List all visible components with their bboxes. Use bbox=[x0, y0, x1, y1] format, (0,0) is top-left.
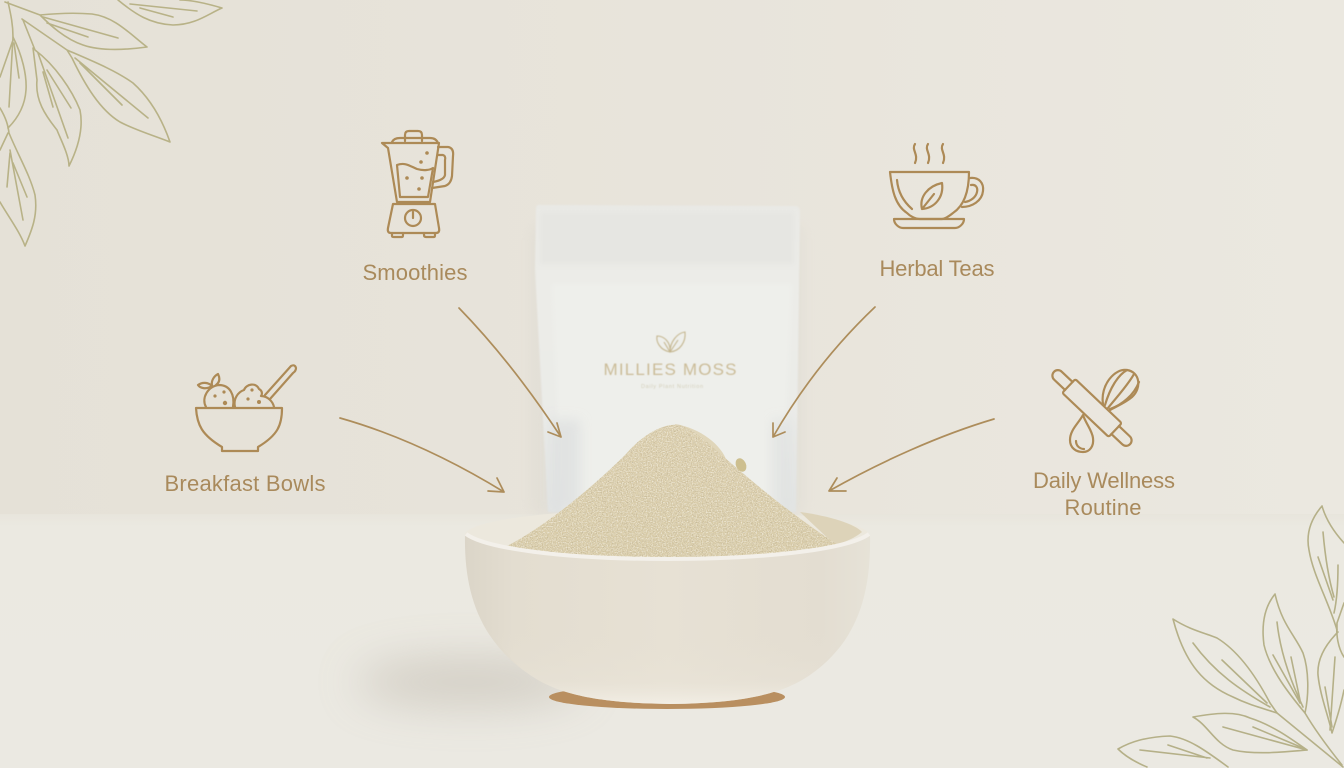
brand logo bbox=[604, 332, 736, 390]
product pouch bbox=[530, 205, 804, 515]
label: Herbal Teas: Herbal Teas bbox=[880, 256, 994, 281]
arrow: smoothies to bowl bbox=[459, 308, 561, 437]
brand name: MILLIES MOSS bbox=[604, 360, 736, 379]
ceramic bowl with powder bbox=[465, 424, 870, 709]
label: Breakfast Bowls: Breakfast Bowls bbox=[164, 471, 326, 496]
callout: herbal teas bbox=[773, 144, 994, 437]
bowl cast shadow bbox=[355, 658, 585, 706]
arrow: breakfast bowls to bowl bbox=[340, 418, 504, 492]
pouch front panel bbox=[552, 284, 792, 510]
pouch left shade bbox=[550, 420, 580, 512]
pouch right shade bbox=[772, 420, 792, 512]
background floor bbox=[0, 514, 1344, 768]
icon: rolling pin, whisk and drop bbox=[1047, 365, 1139, 452]
leaf sprig: top left bbox=[0, 0, 222, 246]
pouch body bbox=[535, 205, 800, 512]
callout: breakfast bowls bbox=[164, 365, 504, 496]
pouch soft shadow bbox=[530, 225, 804, 515]
icon: breakfast bowl bbox=[196, 365, 296, 451]
background wall bbox=[0, 0, 1344, 520]
icon: tea cup bbox=[890, 144, 983, 228]
callout: smoothies bbox=[362, 131, 561, 437]
bowl lower light bbox=[490, 630, 845, 704]
arrow: daily wellness to bowl bbox=[829, 419, 994, 491]
brand tagline: Daily Plant Nutrition bbox=[641, 384, 703, 390]
label: Daily Wellness Routine bbox=[1033, 468, 1175, 520]
label: Daily Wellness Routine: Routine bbox=[1064, 495, 1142, 520]
bowl back interior bbox=[465, 509, 869, 561]
label: Daily Wellness Routine: Daily Wellness bbox=[1033, 468, 1175, 493]
leaf sprig: bottom right bbox=[1118, 506, 1344, 767]
powder back mound bbox=[675, 424, 727, 470]
label: Smoothies: Smoothies bbox=[362, 260, 468, 285]
arrow: herbal teas to bowl bbox=[773, 307, 875, 437]
powder mound bbox=[505, 425, 838, 560]
powder speck bbox=[734, 457, 748, 473]
icon: blender bbox=[382, 131, 453, 237]
bowl rim highlight bbox=[466, 534, 869, 559]
bowl foot bbox=[549, 685, 785, 709]
callout: daily wellness routine bbox=[829, 365, 1175, 520]
bowl outer body bbox=[465, 535, 870, 704]
bowl inner right shade bbox=[800, 512, 862, 545]
icon: brand leaves bbox=[657, 332, 685, 352]
pouch top seal bbox=[540, 212, 794, 264]
